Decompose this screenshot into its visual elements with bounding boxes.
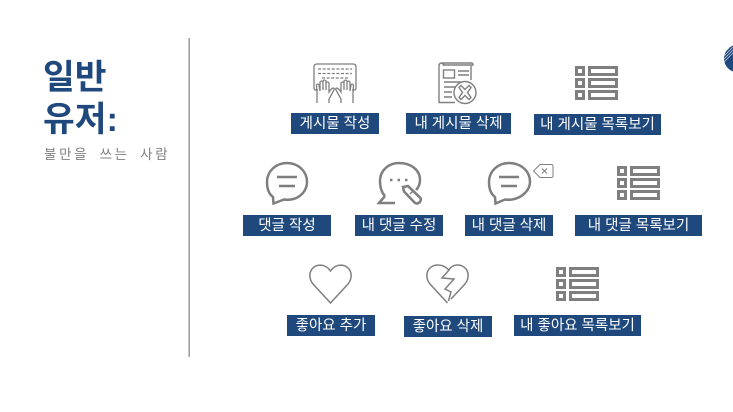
label: my like list xyxy=(514,315,641,336)
label: delete like: 좋아요 삭제 xyxy=(413,319,483,335)
icon: comment write xyxy=(267,163,307,204)
decorative striped circle xyxy=(724,45,733,72)
label: my like list: 내 좋아요 목록보기 xyxy=(520,318,635,334)
label: add like xyxy=(287,315,375,336)
icons xyxy=(188,38,733,357)
label: write comment: 댓글 작성 xyxy=(258,218,316,234)
label: write post xyxy=(291,113,379,134)
icon: post list xyxy=(576,68,616,98)
icon: broken heart xyxy=(427,265,468,303)
label: delete my comment: 내 댓글 삭제 xyxy=(472,218,546,234)
icon: heart xyxy=(310,265,351,303)
label: my post list xyxy=(534,114,661,135)
label: delete like xyxy=(404,316,492,337)
title xyxy=(43,59,118,139)
label: delete my post xyxy=(406,113,511,134)
label: write post: 게시물 작성 xyxy=(300,116,370,132)
icon: keyboard and hands xyxy=(314,64,356,103)
subtitle: 불만을 쓰는 사람 xyxy=(44,147,170,162)
label: edit my comment xyxy=(355,215,443,236)
label: delete my comment xyxy=(465,215,553,236)
icon: document delete xyxy=(439,63,476,104)
icon: comment list xyxy=(618,168,658,198)
label: my comment list: 내 댓글 목록보기 xyxy=(588,218,689,234)
label: delete my post: 내 게시물 삭제 xyxy=(414,116,503,132)
icon: like list xyxy=(558,268,598,300)
title: 유저: xyxy=(43,101,118,139)
vertical divider xyxy=(188,38,190,357)
icon: comment delete xyxy=(489,163,553,204)
icon: comment edit xyxy=(379,163,421,203)
label: write comment xyxy=(243,215,331,236)
label: my post list: 내 게시물 목록보기 xyxy=(540,117,655,133)
label: my comment list xyxy=(575,215,702,236)
label: edit my comment: 내 댓글 수정 xyxy=(362,218,436,234)
title: 일반 xyxy=(43,59,106,97)
label: add like: 좋아요 추가 xyxy=(296,318,366,334)
